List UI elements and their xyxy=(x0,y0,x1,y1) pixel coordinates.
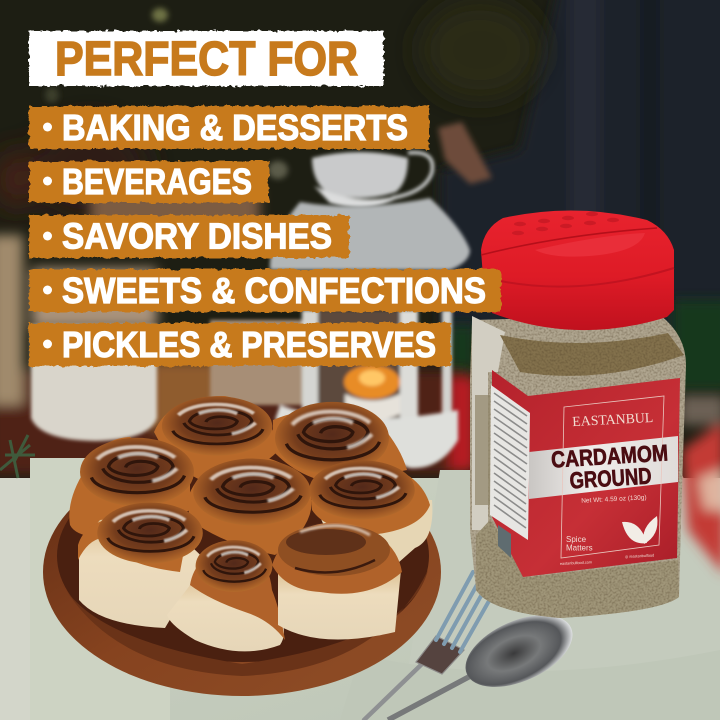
bun: front left xyxy=(78,503,205,628)
social handle: ◎ /eastanbulfood xyxy=(625,553,654,559)
shaker holes xyxy=(512,212,619,235)
list item: baking and desserts: BAKING & DESSERTS xyxy=(62,107,408,148)
spoon xyxy=(388,600,583,720)
jar label xyxy=(490,370,680,577)
blurred foliage and bokeh xyxy=(0,0,540,220)
bun: centre xyxy=(187,455,312,555)
white band xyxy=(529,436,678,499)
red shaker lid xyxy=(481,210,674,330)
bun: front centre xyxy=(167,540,285,651)
white lantern xyxy=(210,198,470,468)
warm table background xyxy=(0,190,476,475)
tagline: Spice xyxy=(566,535,587,544)
fork xyxy=(364,572,502,720)
list item: savory dishes: SAVORY DISHES xyxy=(62,216,332,256)
curtain backdrop xyxy=(440,0,720,340)
nutrition panel xyxy=(490,385,530,540)
product name second line: GROUND xyxy=(569,463,652,493)
bun: right xyxy=(309,460,432,563)
spice jar xyxy=(470,210,686,618)
heading: perfect for: PERFECT FOR xyxy=(55,33,358,86)
website: eastanbulfood.com xyxy=(560,560,592,566)
blurred red ornament xyxy=(680,395,720,575)
right foliage xyxy=(450,300,720,390)
bun: top xyxy=(154,396,279,480)
logo frame xyxy=(561,396,664,558)
bun: left xyxy=(69,437,194,537)
blurred leaf and lights xyxy=(45,8,492,184)
bun: top right xyxy=(272,402,407,484)
product name: CARDAMOM xyxy=(550,439,669,473)
net weight: Net Wt: 4.59 oz (130g) xyxy=(581,494,647,505)
brand name: EASTANBUL xyxy=(572,411,654,430)
list item: sweets and confections: SWEETS & CONFECTIONS xyxy=(62,270,486,311)
wooden plate xyxy=(43,448,441,696)
QR code xyxy=(498,525,511,558)
leaf icon xyxy=(622,516,657,544)
list item: beverages: BEVERAGES xyxy=(62,161,252,202)
tagline: Matters xyxy=(566,544,593,552)
bun: front right xyxy=(272,522,402,640)
rosemary sprig xyxy=(0,435,35,478)
white mug xyxy=(31,325,157,441)
teacup on lantern xyxy=(312,152,432,208)
cloth xyxy=(0,458,720,720)
list item: pickles and preserves: PICKLES & PRESERVES xyxy=(62,324,436,365)
jar body xyxy=(470,315,686,618)
wooden plate with buns xyxy=(43,396,441,696)
